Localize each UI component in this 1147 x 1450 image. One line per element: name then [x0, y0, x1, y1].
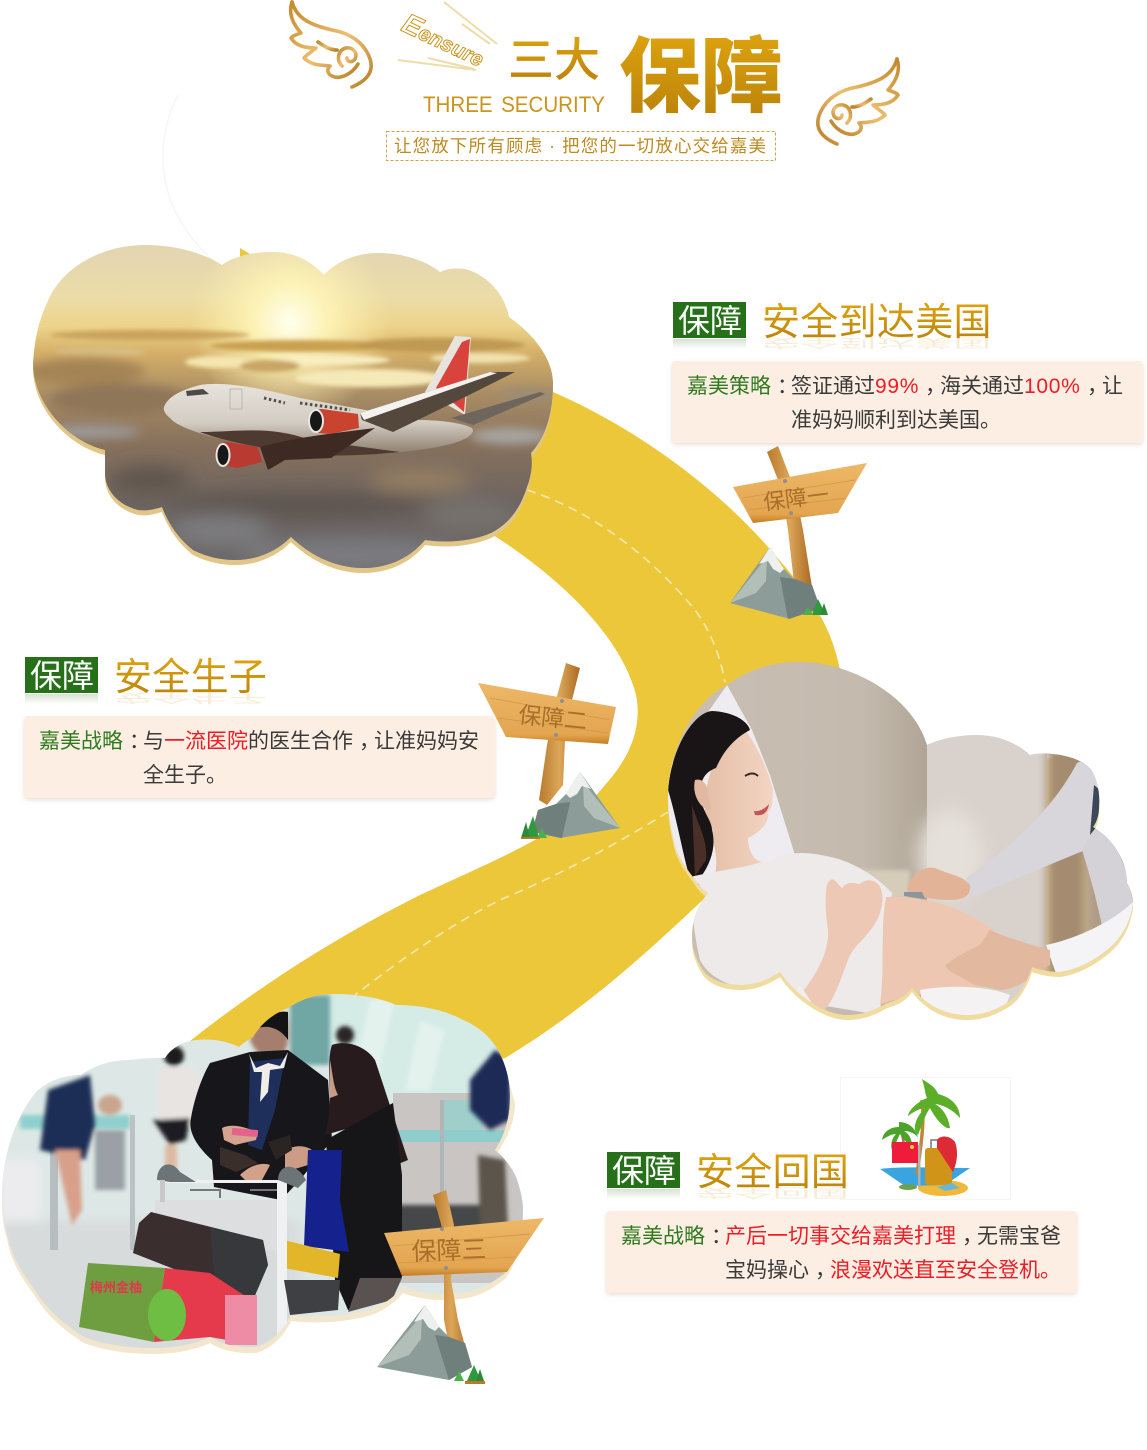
black and brown suitcase — [133, 1212, 268, 1300]
text panel: 保障三: ， — [815, 1259, 836, 1282]
text panel: 保障二: 让准妈妈安 — [374, 730, 479, 753]
road centre dashed line — [355, 490, 725, 995]
text panel: 保障一: 100% — [1024, 375, 1081, 398]
wooden board: 保障一 — [762, 482, 830, 515]
section title: 安全到达美国 — [762, 302, 992, 344]
signpost three with mountain — [377, 1190, 544, 1384]
section title: 安全回国 — [696, 1152, 849, 1194]
text panel: 保障一 — [672, 361, 1143, 443]
green tag — [607, 1152, 680, 1199]
heading: THREE SECURITY: THREE SECURITY — [423, 92, 605, 117]
section title: 安全生子 — [114, 690, 267, 705]
tagline box — [386, 132, 776, 160]
icon: Ensure lettering with speed lines: Eensure — [397, 7, 490, 73]
text panel: 保障一: 签证通过 — [791, 375, 875, 398]
text panel: 保障一: 让 — [1102, 375, 1123, 398]
mountain — [730, 547, 828, 619]
text panel: 保障三: 浪漫欢送直至安全登机。 — [830, 1259, 1061, 1282]
woman figure — [668, 711, 1005, 1015]
doctor arm and hands — [904, 762, 1135, 1020]
green tag — [25, 657, 98, 704]
section title: 安全生子 — [114, 657, 267, 699]
photo cloud: couple with luggage at airport — [0, 990, 530, 1360]
man and woman figures — [190, 1012, 408, 1312]
icon: right wing — [818, 59, 898, 144]
heading: 保障 安全回国 — [607, 1152, 849, 1200]
green tag: 保障 — [678, 303, 742, 339]
text panel: 保障二: 与 — [143, 730, 164, 753]
photo cloud: pregnant woman and doctor — [660, 655, 1135, 1025]
text panel: 保障一: 海关通过 — [940, 375, 1024, 398]
wooden board — [478, 683, 616, 744]
text panel: 保障三: 产后一切事交给嘉美打理 — [725, 1225, 956, 1248]
heading: 保障 安全到达美国 — [673, 302, 992, 350]
luggage trolley — [155, 1164, 340, 1350]
icon: palm trees, flag and suitcase — [840, 1078, 1010, 1200]
text panel: 保障二: 全生子。 — [143, 764, 227, 787]
signpost one with mountain — [730, 446, 867, 619]
text panel: 保障二: 一流医院 — [164, 730, 248, 753]
wooden post — [767, 446, 812, 592]
background passengers — [40, 1026, 511, 1230]
text panel: 保障一: ： — [777, 375, 798, 398]
yellow handbag — [284, 1240, 340, 1278]
green tag: 保障 — [612, 1153, 676, 1189]
text panel: 保障一: ， — [1087, 375, 1108, 398]
photo cloud: airplane above the clouds — [33, 245, 553, 573]
green tag: 保障 — [30, 658, 94, 694]
text panel: 保障一: 准妈妈顺利到达美国。 — [791, 409, 1001, 432]
heading: 三大: 三大 — [508, 34, 600, 86]
text panel: 保障二: 的医生合作 — [248, 730, 353, 753]
fruit boxes — [79, 1263, 257, 1345]
title block — [291, 2, 898, 160]
text panel: 保障二: ， — [359, 730, 380, 753]
text panel: 保障二: ： — [129, 730, 150, 753]
airplane — [164, 336, 545, 470]
text panel: 保障三: ， — [962, 1225, 983, 1248]
section title: 安全回国 — [696, 1185, 849, 1200]
wooden post — [433, 1190, 470, 1365]
fruit boxes: 梅州金柚 — [90, 1280, 142, 1295]
heading: 保障: 保障 — [619, 32, 783, 123]
text panel: 保障一: 嘉美策略 — [687, 375, 771, 398]
text panel: 保障二 — [24, 716, 495, 798]
faint decorative arc behind first photo — [163, 95, 215, 262]
pillow — [660, 685, 795, 880]
text panel: 保障三: 无需宝爸 — [977, 1225, 1061, 1248]
yellow winding road — [185, 248, 840, 1100]
tagline box: 让您放下所有顾虑 · 把您的一切放心交给嘉美 — [394, 136, 766, 156]
signpost two with mountain — [478, 663, 620, 839]
icon: left wing — [291, 2, 371, 87]
text panel: 保障一: 99% — [875, 375, 919, 398]
text panel: 保障一: ， — [925, 375, 946, 398]
text panel: 保障三: 宝妈操心 — [725, 1259, 809, 1282]
wooden board: 保障二 — [517, 701, 589, 735]
mountain — [377, 1305, 485, 1384]
text panel: 保障三: 嘉美战略 — [621, 1225, 705, 1248]
section title: 安全到达美国 — [762, 335, 992, 350]
text panel: 保障三: ： — [711, 1225, 732, 1248]
wooden board — [384, 1218, 544, 1276]
heading: 保障 安全生子 — [25, 657, 267, 705]
wooden board: 保障三 — [411, 1236, 487, 1266]
wooden board — [733, 463, 867, 523]
text panel: 保障三 — [606, 1211, 1077, 1293]
green tag — [673, 302, 746, 349]
text panel: 保障二: 嘉美战略 — [39, 730, 123, 753]
mountain — [521, 772, 620, 839]
wooden post — [539, 663, 580, 805]
